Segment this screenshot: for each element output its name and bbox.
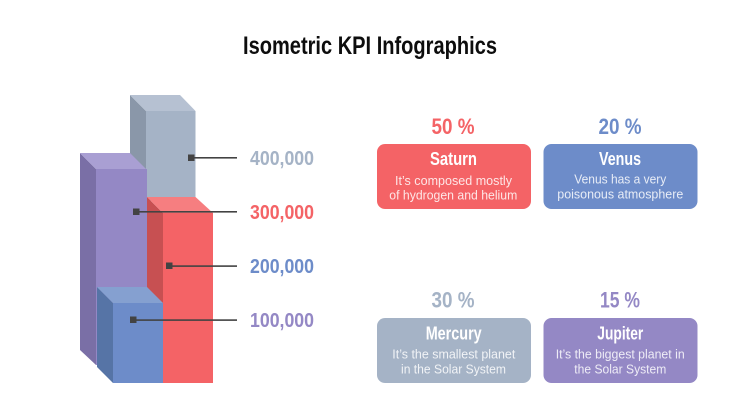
description: Venus: poisonous atmosphere xyxy=(557,187,683,201)
card: Jupiter xyxy=(544,318,698,383)
description: Jupiter: It’s the biggest planet in xyxy=(556,348,685,362)
description: Saturn xyxy=(389,174,517,202)
leader line: 300,000 xyxy=(133,208,237,215)
bar: purple xyxy=(80,153,147,365)
leader line: 400,000 xyxy=(188,154,237,161)
bar: red xyxy=(147,197,213,383)
panel: Jupiter xyxy=(544,288,698,383)
percent: 30 %: 30 % xyxy=(432,288,474,312)
bar: gray 400,000 xyxy=(130,95,196,201)
name: Saturn: Saturn xyxy=(430,149,477,169)
description: Mercury xyxy=(392,348,516,377)
value label: 400,000: 400,000 xyxy=(250,148,314,170)
card: Mercury xyxy=(377,318,531,383)
card: Venus xyxy=(544,144,698,209)
leader line: 100,000 xyxy=(130,316,237,323)
title: Isometric KPI Infographics xyxy=(243,32,497,60)
description: Venus xyxy=(557,173,683,201)
value label: 300,000: 300,000 xyxy=(250,202,314,224)
percent: 15 %: 15 % xyxy=(600,288,640,312)
description: Mercury: in the Solar System xyxy=(401,363,506,377)
name: Mercury: Mercury xyxy=(426,323,482,343)
value label: 200,000: 200,000 xyxy=(250,256,314,278)
description: Jupiter: the Solar System xyxy=(574,363,666,377)
description: Venus: Venus has a very xyxy=(574,173,667,187)
name: Jupiter: Jupiter xyxy=(597,323,643,343)
description: Mercury: It’s the smallest planet xyxy=(392,348,516,362)
description: Saturn: of hydrogen and helium xyxy=(389,188,517,202)
value label: 100,000: 100,000 xyxy=(250,310,314,332)
percent: 20 %: 20 % xyxy=(598,114,642,139)
description: Jupiter xyxy=(556,348,685,377)
panel: Saturn xyxy=(377,114,531,209)
name: Venus: Venus xyxy=(599,149,641,169)
leader line: 200,000 xyxy=(166,262,237,269)
bar: blue xyxy=(97,287,163,383)
percent: 50 %: 50 % xyxy=(432,114,474,139)
description: Saturn: It’s composed mostly xyxy=(395,174,513,188)
isometric bar chart xyxy=(80,95,213,383)
panel: Mercury xyxy=(377,288,531,383)
panel: Venus xyxy=(544,114,698,209)
card: Saturn xyxy=(377,144,531,209)
